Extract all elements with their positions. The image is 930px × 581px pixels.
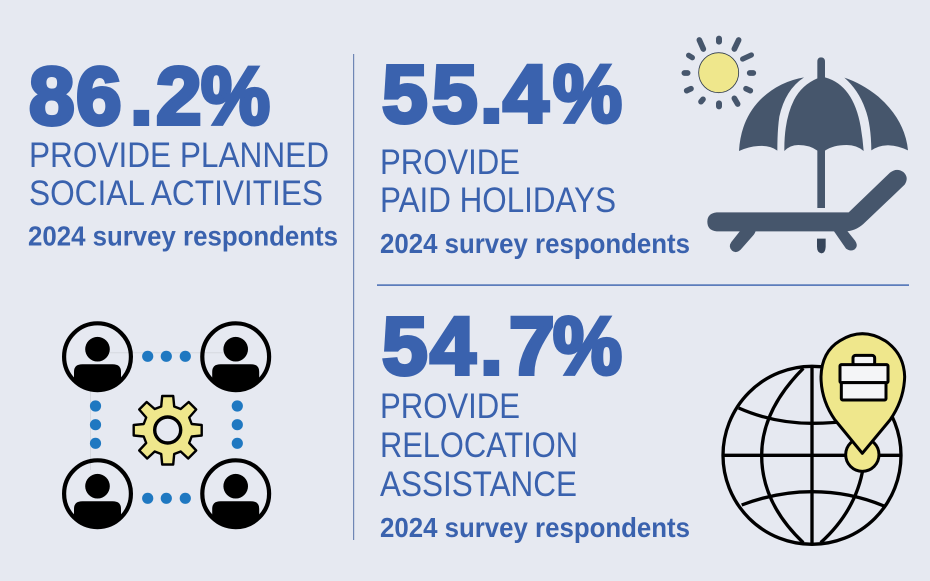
connector dots — [90, 351, 243, 504]
vertical divider — [353, 54, 354, 540]
stat block: planned social activities — [28, 51, 338, 252]
label: provide planned social activities: SOCIAL ACTIVITIES — [29, 174, 323, 213]
icon: sun — [684, 39, 753, 106]
faint connector lines — [90, 353, 225, 470]
stat block: paid holidays — [380, 49, 690, 259]
horizontal divider — [377, 284, 909, 286]
icon: globe with location pin — [723, 334, 905, 544]
icon: lounger — [707, 170, 907, 253]
label: provide relocation assistance: PROVIDE — [380, 387, 520, 426]
label: provide paid holidays — [380, 143, 616, 220]
icon: globe — [723, 366, 901, 544]
label: provide relocation assistance: ASSISTANCE — [380, 465, 577, 504]
icon: sun and beach lounger — [684, 39, 908, 253]
stat: 86.2%: % — [201, 51, 270, 142]
label: provide planned social activities — [29, 136, 329, 213]
icon: location pin — [821, 334, 905, 471]
icon: team network with gear — [64, 323, 269, 527]
stat: 55.4%: 55.4 — [382, 49, 549, 140]
stat: 54.7%: 54.7 — [382, 301, 555, 392]
stat: 54.7%: % — [553, 301, 622, 392]
icon: umbrella — [739, 57, 908, 208]
stat: 55.4%: % — [553, 49, 622, 140]
stat: 86.2%: 86.2 — [29, 51, 202, 142]
icon: gear — [134, 396, 202, 464]
label: provide relocation assistance — [380, 387, 578, 504]
label: provide relocation assistance: RELOCATION — [380, 426, 578, 465]
stat block: relocation assistance — [380, 301, 690, 543]
source note: 2024 survey respondents — [28, 220, 338, 252]
source note: 2024 survey respondents — [380, 512, 690, 543]
stat: 55.4% — [382, 49, 622, 140]
source note: 2024 survey respondents — [380, 228, 690, 259]
icon: people — [64, 323, 269, 527]
label: provide planned social activities: PROVIDE PLANNED — [29, 136, 329, 175]
icon: briefcase — [840, 355, 888, 400]
label: provide paid holidays: PROVIDE — [380, 143, 520, 182]
label: provide paid holidays: PAID HOLIDAYS — [380, 181, 616, 220]
